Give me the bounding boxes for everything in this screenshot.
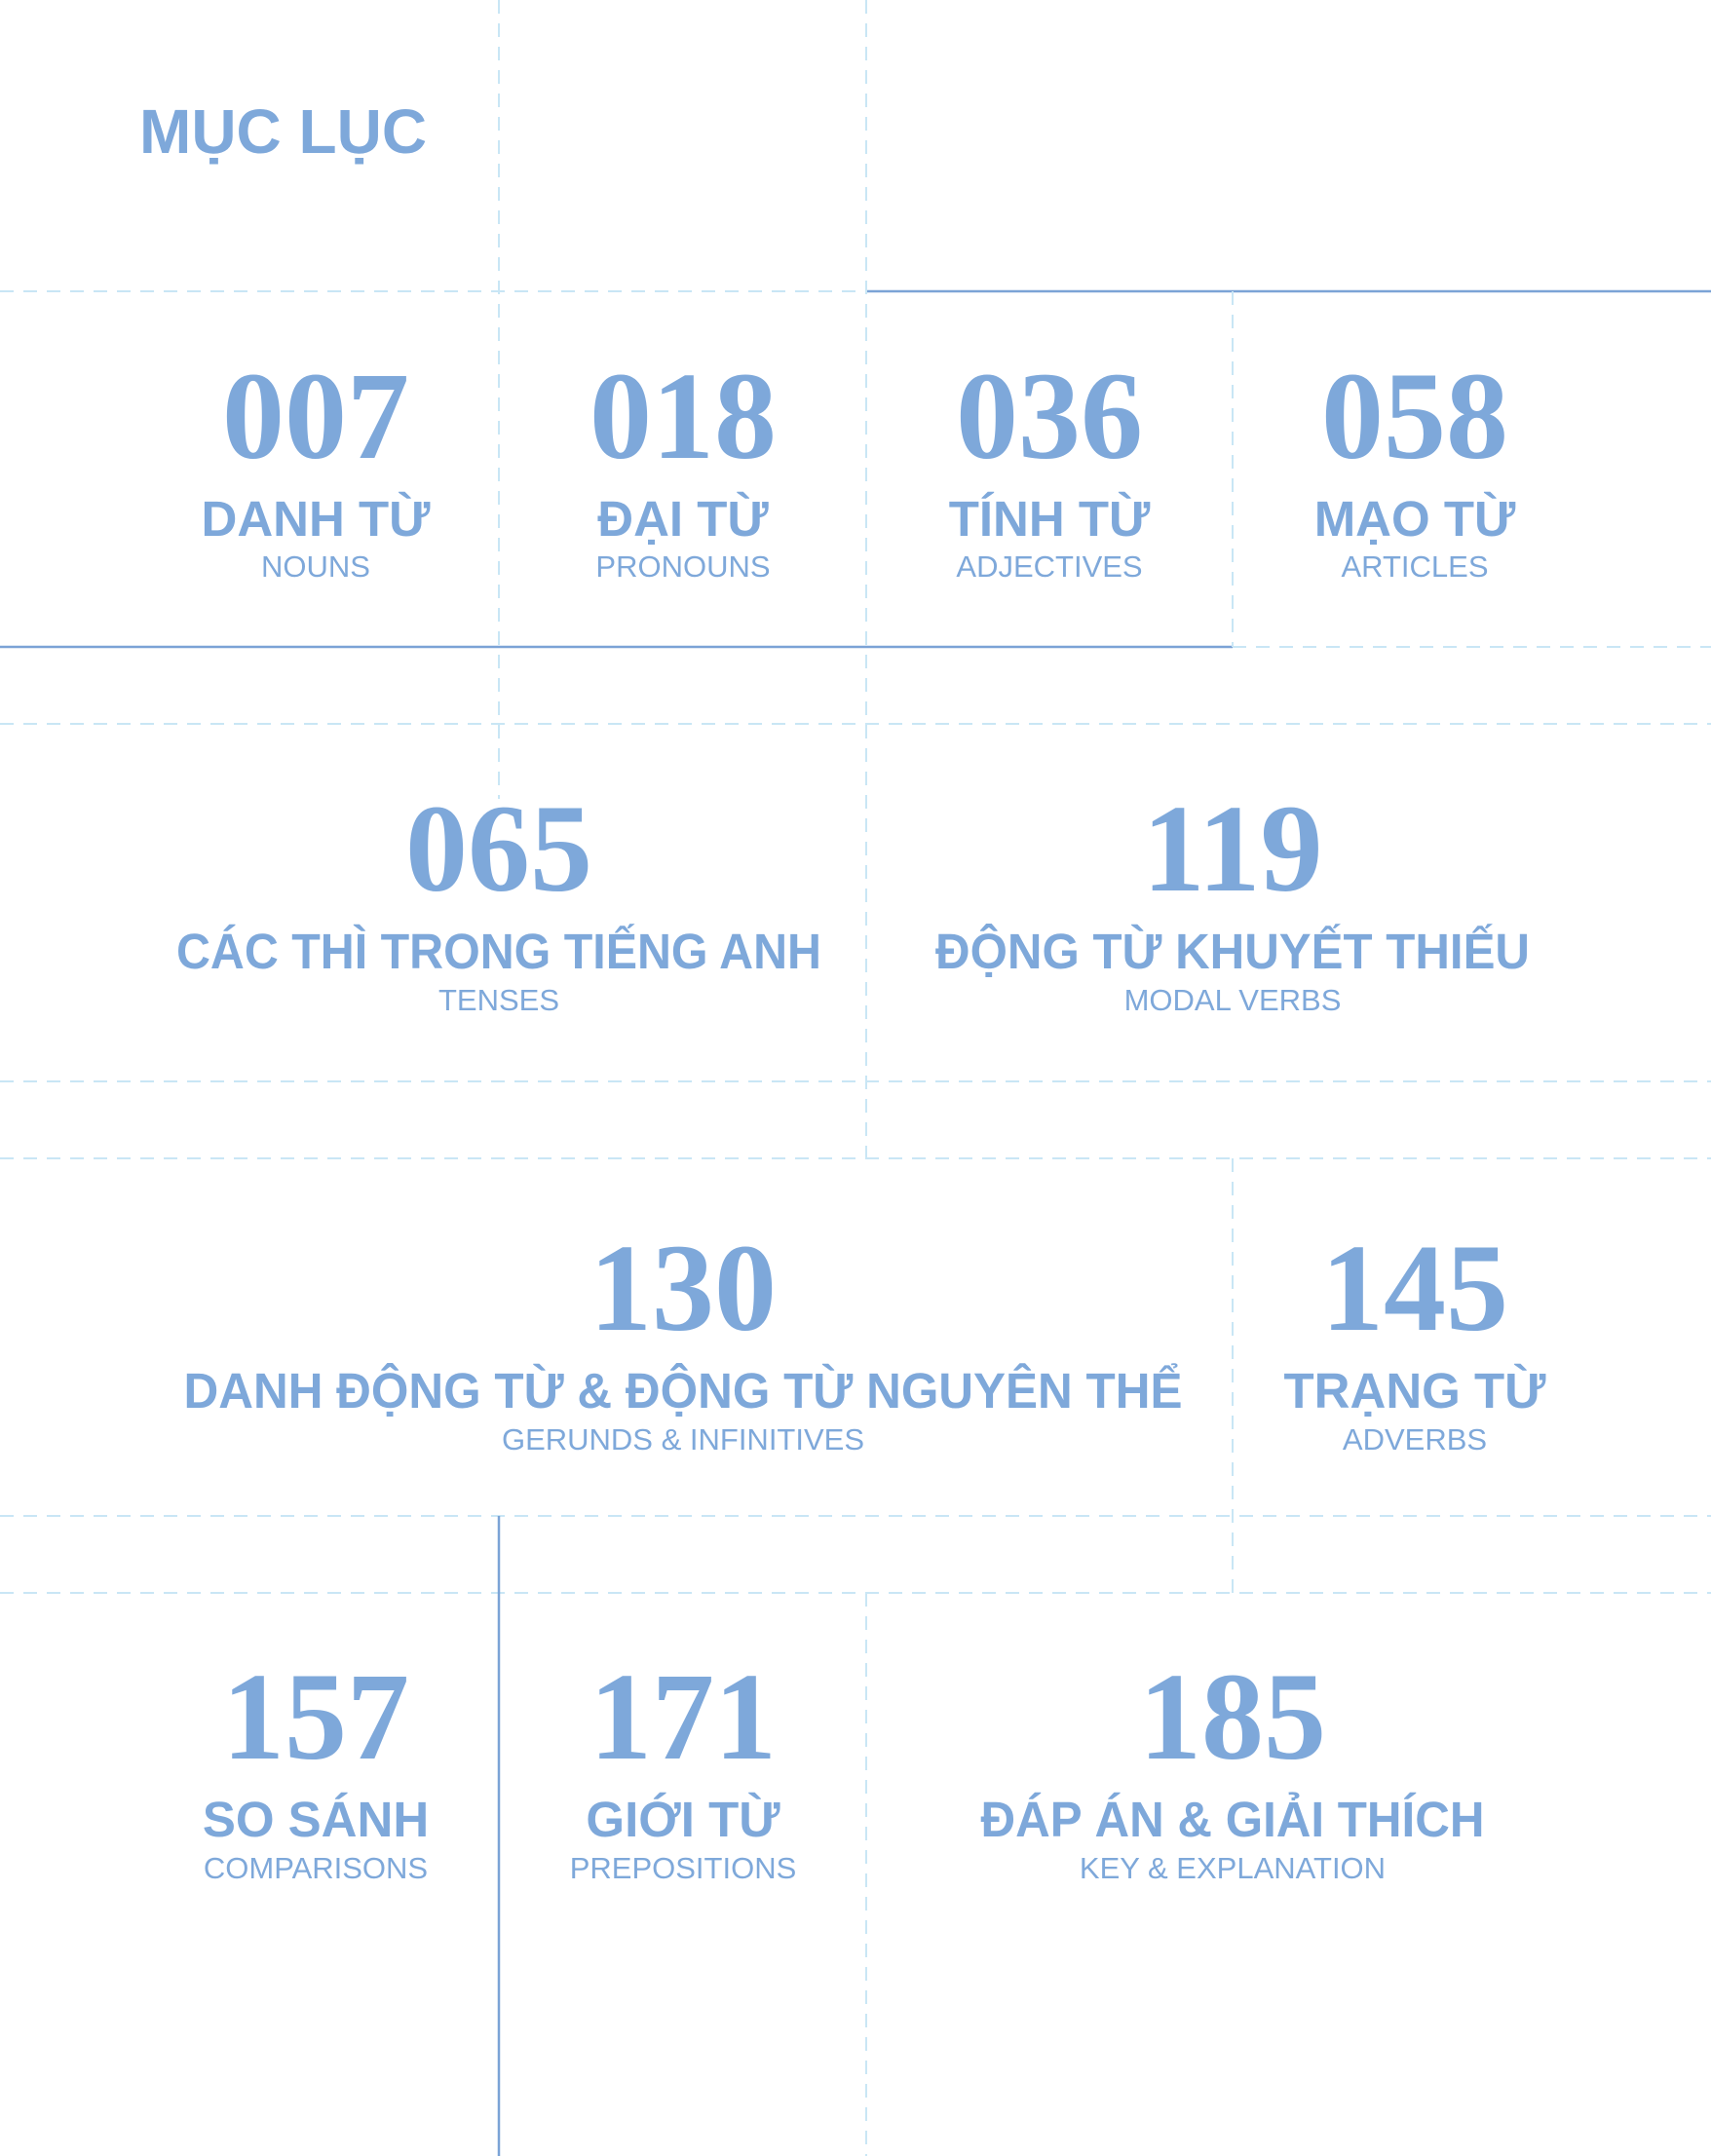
entry: adverbs: 145	[1321, 1219, 1508, 1357]
entry: adjectives: 036	[956, 347, 1143, 485]
entry: key: ĐÁP ÁN & GIẢI THÍCH	[980, 1791, 1485, 1847]
entry: modal verbs	[935, 779, 1530, 1017]
entry: key	[980, 1647, 1485, 1885]
entry: nouns: 007	[222, 347, 409, 485]
entry: prepositions: PREPOSITIONS	[570, 1851, 796, 1885]
entry: tenses: CÁC THÌ TRONG TIẾNG ANH	[176, 923, 821, 979]
entry: articles: MẠO TỪ	[1314, 491, 1516, 547]
entry: tenses	[176, 779, 821, 1017]
entry: pronouns	[589, 347, 777, 584]
entry: comparisons: COMPARISONS	[204, 1851, 428, 1885]
entry: tenses: TENSES	[438, 983, 559, 1017]
entry: articles: ARTICLES	[1341, 549, 1489, 584]
title: MỤC LỤC	[139, 96, 427, 167]
entry: adjectives: ADJECTIVES	[956, 549, 1143, 584]
entry: modal verbs: 119	[1143, 779, 1322, 918]
entry: pronouns: 018	[589, 347, 777, 485]
entry: articles	[1314, 347, 1516, 584]
entry: adjectives	[949, 347, 1151, 584]
entry: adverbs	[1284, 1219, 1546, 1456]
entry: gerunds: DANH ĐỘNG TỪ & ĐỘNG TỪ NGUYÊN THỂ	[183, 1362, 1183, 1418]
entry: comparisons: SO SÁNH	[203, 1792, 429, 1847]
entry: adverbs: ADVERBS	[1343, 1422, 1487, 1456]
entry: key: 185	[1139, 1647, 1326, 1786]
entry: tenses: 065	[405, 779, 592, 918]
entry: modal verbs: ĐỘNG TỪ KHUYẾT THIẾU	[935, 923, 1530, 979]
entry: adjectives: TÍNH TỪ	[949, 491, 1151, 547]
entry: prepositions	[570, 1647, 796, 1885]
entry: modal verbs: MODAL VERBS	[1124, 983, 1341, 1017]
entry: comparisons: 157	[222, 1647, 409, 1786]
entry: prepositions: 171	[589, 1647, 777, 1786]
entry: prepositions: GIỚI TỪ	[586, 1792, 780, 1847]
entry: nouns: DANH TỪ	[202, 491, 431, 547]
entry: pronouns: ĐẠI TỪ	[597, 491, 769, 547]
entry: gerunds	[183, 1219, 1183, 1456]
entry: key: KEY & EXPLANATION	[1080, 1851, 1386, 1885]
entry: nouns: NOUNS	[261, 549, 370, 584]
entry: comparisons	[203, 1647, 429, 1885]
entry: adverbs: TRẠNG TỪ	[1284, 1363, 1546, 1418]
entry: gerunds: GERUNDS & INFINITIVES	[502, 1422, 864, 1456]
entry: gerunds: 130	[589, 1219, 777, 1357]
entry: nouns	[202, 347, 431, 584]
entry: articles: 058	[1321, 347, 1508, 485]
entry: pronouns: PRONOUNS	[595, 549, 771, 584]
